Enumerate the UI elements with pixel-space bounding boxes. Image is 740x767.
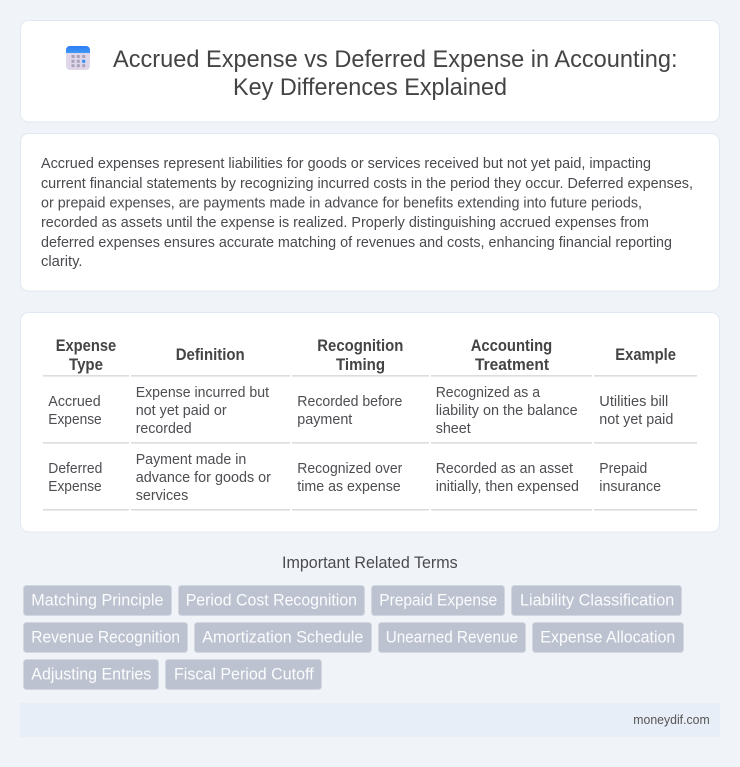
- footer bar: [20, 703, 720, 737]
- chip: expense allocation: [532, 622, 684, 652]
- chip: adjusting entries: [24, 660, 158, 690]
- table header row: Type: [69, 356, 103, 374]
- table row: accrued expense: sheet: [436, 421, 471, 437]
- table row: accrued expense: Recorded before: [297, 394, 402, 410]
- chip: unearned revenue: [378, 622, 526, 652]
- table row: deferred expense: Prepaid: [599, 461, 647, 477]
- table header row: Accounting: [471, 337, 552, 355]
- title: Key Differences Explained: [233, 74, 507, 101]
- related terms chips: [24, 586, 684, 690]
- related terms heading: Important Related Terms: [282, 554, 458, 572]
- table row: accrued expense: liability on the balance: [436, 403, 578, 419]
- table row: deferred expense: Expense: [48, 479, 102, 495]
- table header row: Recognition: [317, 337, 403, 355]
- chip: unearned revenue: Unearned Revenue: [386, 629, 518, 647]
- table header row: Treatment: [475, 356, 549, 374]
- intro text block: clarity.: [41, 254, 82, 270]
- chip: prepaid expense: Prepaid Expense: [379, 592, 497, 610]
- panel: header: [20, 20, 720, 122]
- table row: deferred expense: [48, 452, 661, 504]
- chip: revenue recognition: Revenue Recognition: [31, 629, 180, 647]
- panel: comparison table: [20, 312, 720, 532]
- intro text block: Accrued expenses represent liabilities for goods or services received but not yet paid, impacting: [41, 156, 651, 172]
- footer source text: moneydif.com: [633, 713, 710, 727]
- chip: amortization schedule: [194, 622, 372, 652]
- table row: accrued expense: payment: [297, 412, 352, 428]
- icon: calendar: [66, 46, 90, 70]
- table row: deferred expense: insurance: [599, 479, 661, 495]
- table row: deferred expense: Recognized over: [297, 461, 402, 477]
- table row: accrued expense: Recognized as a: [436, 385, 541, 401]
- panel: intro: [20, 134, 720, 291]
- chip: matching principle: [24, 586, 172, 616]
- table row: accrued expense: Expense: [48, 412, 102, 428]
- chip: expense allocation: Expense Allocation: [540, 629, 675, 647]
- table row: deferred expense: initially, then expensed: [436, 479, 579, 495]
- table header row: Timing: [336, 356, 385, 374]
- table row: accrued expense: recorded: [136, 421, 192, 437]
- table row: deferred expense: Recorded as an asset: [436, 461, 573, 477]
- intro text block: recorded as assets until the expense is realized. Properly distinguishing accrued expenses from: [41, 215, 649, 231]
- chip: period cost recognition: [178, 586, 364, 616]
- chip: fiscal period cutoff: Fiscal Period Cutoff: [174, 666, 314, 684]
- intro text block: [41, 156, 693, 270]
- chip: matching principle: Matching Principle: [31, 592, 163, 610]
- table row: accrued expense: not yet paid or: [136, 403, 227, 419]
- chip: prepaid expense: [372, 586, 504, 616]
- table row: deferred expense: services: [136, 488, 188, 504]
- chip: liability classification: Liability Classification: [520, 592, 674, 610]
- table header row: Example: [615, 346, 676, 364]
- intro text block: current financial statements by recognizing incurred costs in the period they occur. Deferred expenses,: [41, 176, 693, 192]
- chip: liability classification: [512, 586, 682, 616]
- table row: deferred expense: Deferred: [48, 461, 102, 477]
- table header row: Definition: [176, 346, 245, 364]
- table row: accrued expense: Expense incurred but: [136, 385, 269, 401]
- intro text block: deferred expenses ensures accurate matching of revenues and costs, enhancing financial reporting: [41, 235, 672, 251]
- table header row: [56, 337, 676, 374]
- table row: accrued expense: Utilities bill: [599, 394, 668, 410]
- table row: accrued expense: not yet paid: [599, 412, 673, 428]
- table row: deferred expense: Payment made in: [136, 452, 246, 468]
- chip: amortization schedule: Amortization Schedule: [202, 629, 363, 647]
- table row: accrued expense: Accrued: [48, 394, 101, 410]
- chip: fiscal period cutoff: [166, 660, 322, 690]
- title: Accrued Expense vs Deferred Expense in Accounting:: [113, 46, 678, 73]
- table header row: Expense: [56, 337, 116, 355]
- chip: period cost recognition: Period Cost Recognition: [186, 592, 357, 610]
- chip: revenue recognition: [24, 622, 188, 652]
- chip: adjusting entries: Adjusting Entries: [31, 666, 151, 684]
- table row: deferred expense: advance for goods or: [136, 470, 271, 486]
- intro text block: or prepaid expenses, are payments made in advance for benefits extending into future periods,: [41, 196, 642, 212]
- title: [113, 46, 678, 101]
- table row: deferred expense: time as expense: [297, 479, 401, 495]
- table row: accrued expense: [48, 385, 673, 437]
